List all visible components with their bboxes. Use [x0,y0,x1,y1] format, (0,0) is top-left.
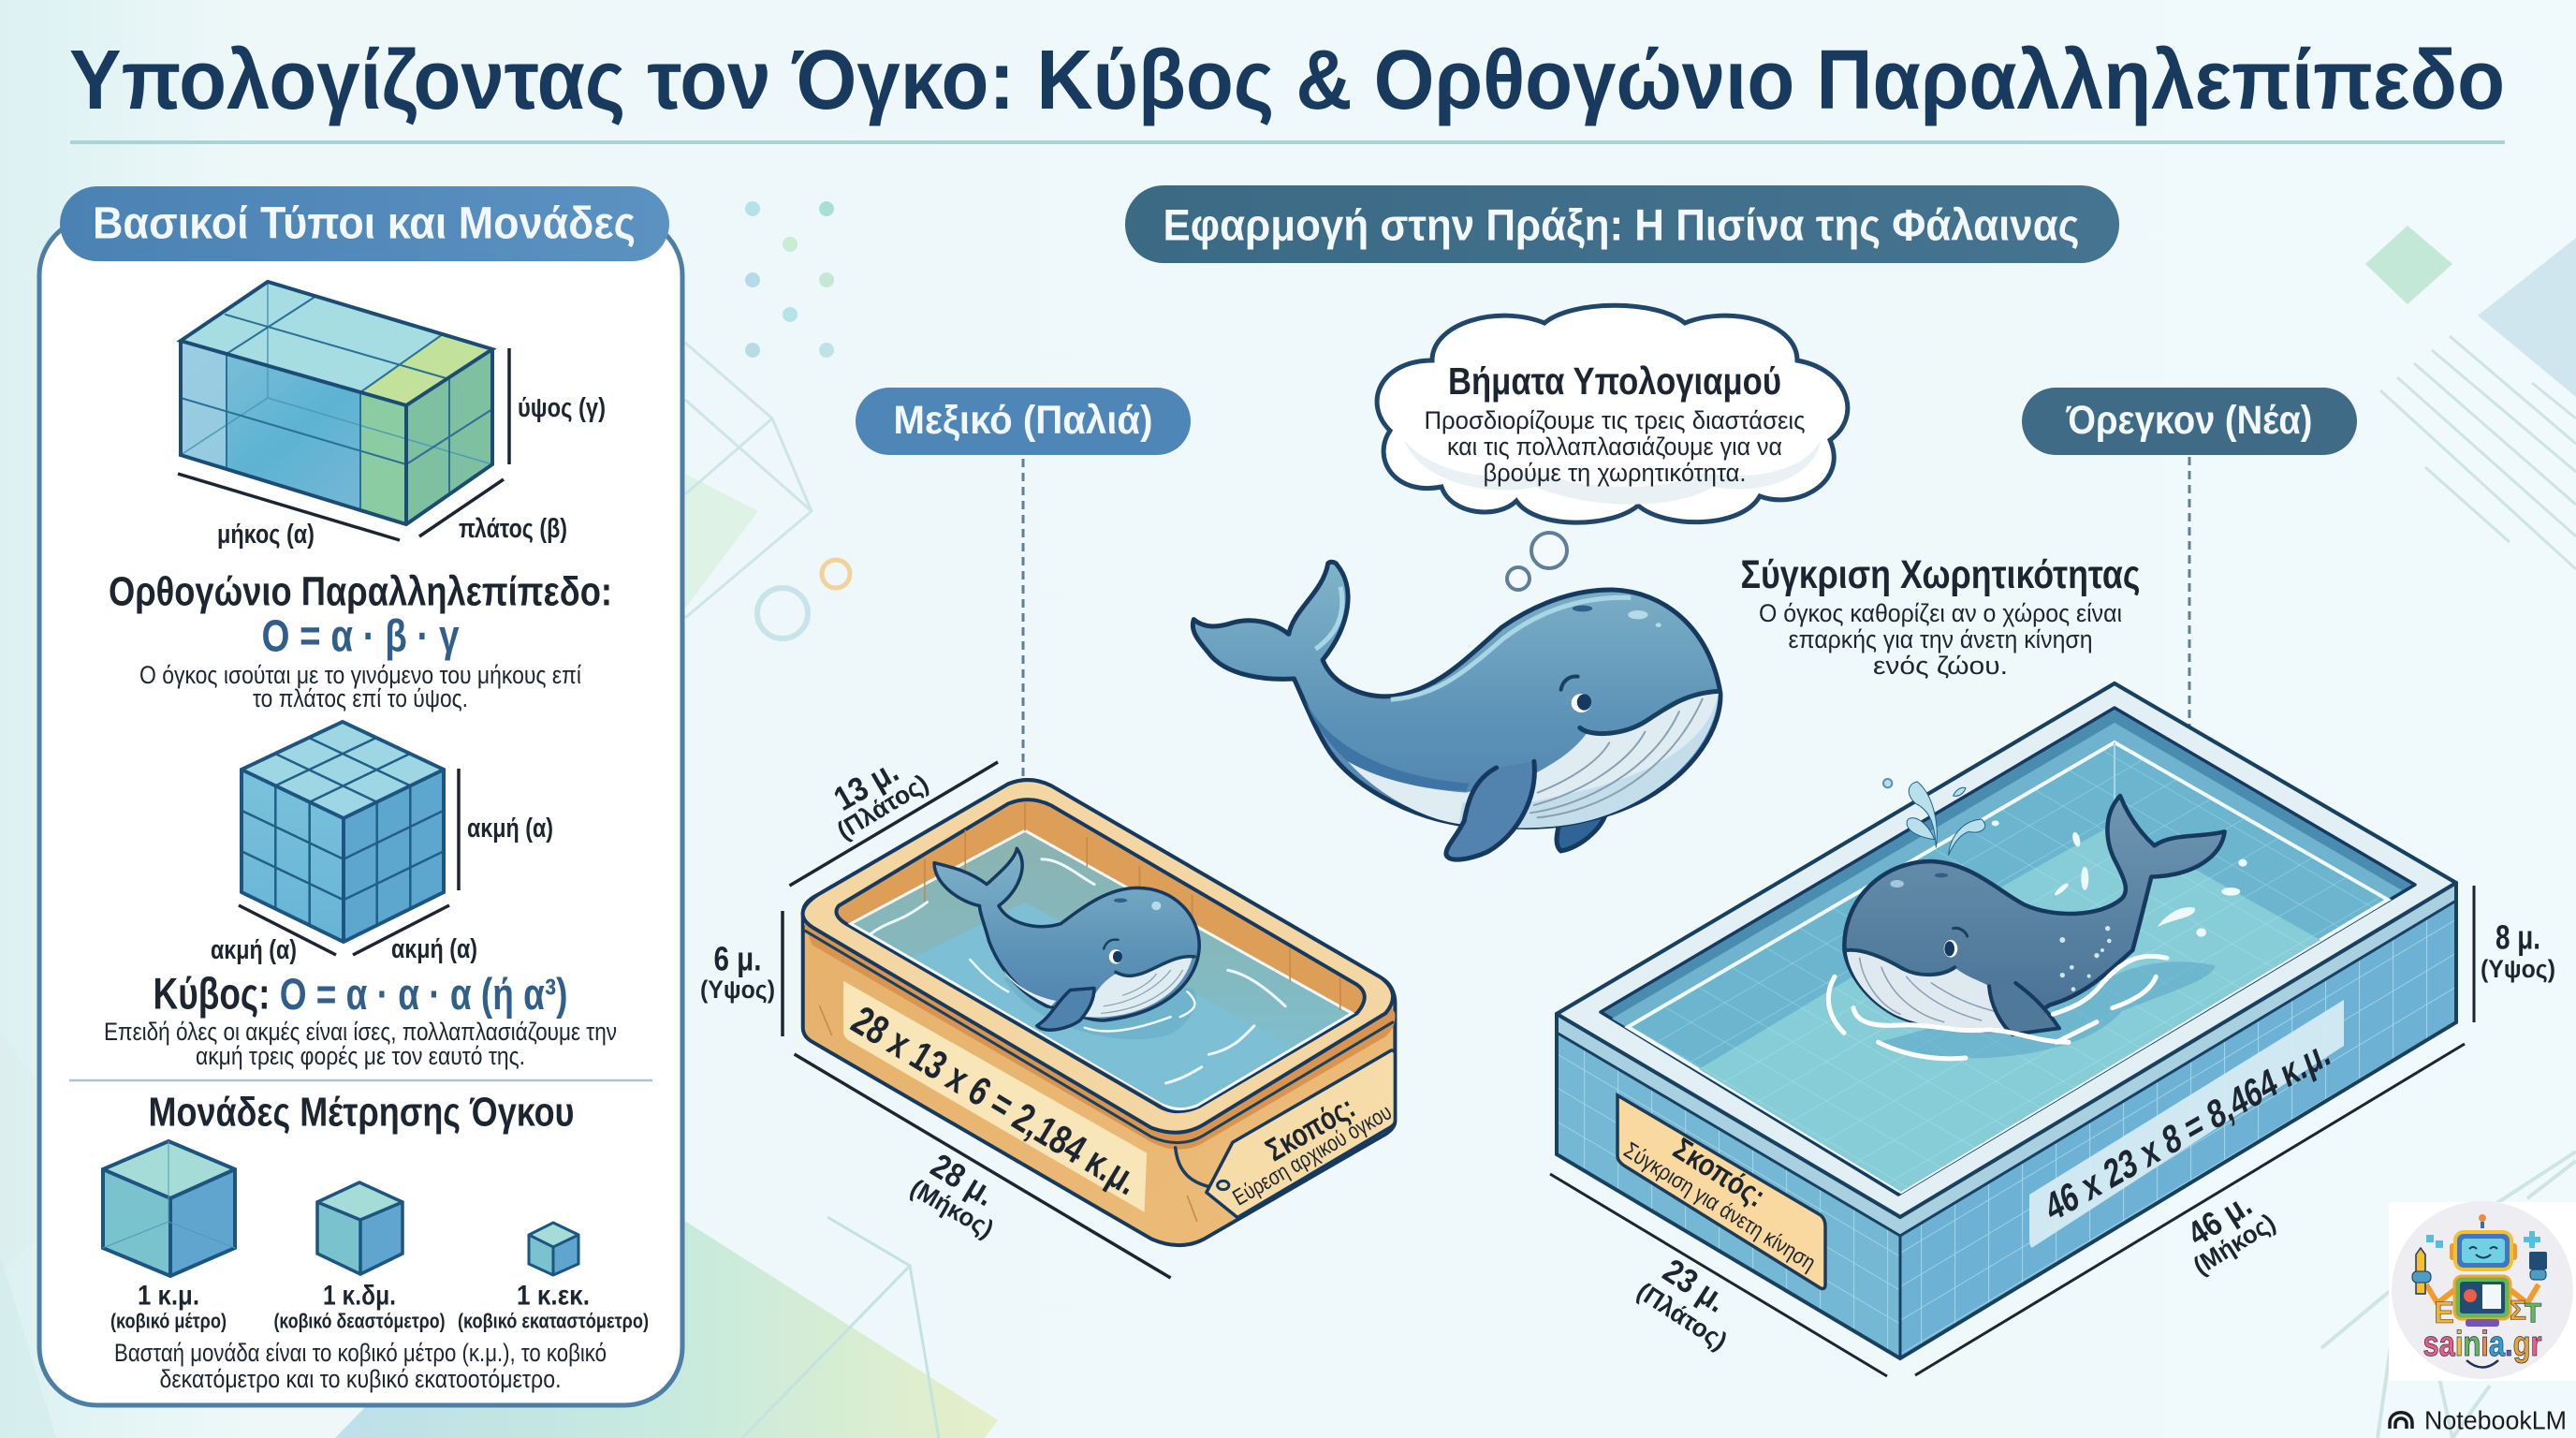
logo: sainia.gr [2389,1201,2576,1381]
prism formula: το πλάτος επί το ύψος. [253,684,468,712]
cube dimension labels: ακμή (α) [211,935,297,965]
Mexico whale [934,848,1199,1039]
Mexico tag text: Σκοπός: [1260,1090,1361,1168]
unit labels: (κοβικό μέτρο) [110,1309,227,1333]
logo: sainia.gr: Σ [2510,1296,2526,1326]
comparison text: ενός ζώου. [1873,652,2008,680]
heading: application [1125,185,2119,263]
prism formula: Ο όγκος ισούται με το γινόμενο του μήκους επί [139,661,581,689]
units note [114,1339,607,1393]
unit labels: (κοβικό εκαταστόμετρο) [458,1309,649,1333]
cube dimension labels: ακμή (α) [467,814,553,844]
unit labels: 1 κ.δμ. [323,1281,396,1311]
Mexico volume calculation: 28 x 13 x 6 = 2,184 κ.μ. [843,998,1147,1204]
label: Mexico [856,388,1191,455]
Oregon tag: Σύγκριση για άνετη κίνηση [1619,1137,1820,1276]
panel heading [60,186,669,261]
panel frame [39,217,682,1405]
comparison text: επαρκής για την άνετη κίνηση [1788,625,2093,653]
diagram: cube [239,722,459,955]
label: Mexico: Μεξικό (Παλιά) [893,398,1153,443]
label: Oregon [2022,388,2357,455]
logo: sainia.gr: Ε [2434,1296,2454,1329]
Oregon dimensions: (Μήκος) [2188,1209,2280,1280]
thought cloud: calculation steps: Προσδιορίζουμε τις τρεις διαστάσεις [1425,406,1805,434]
Oregon dimensions: 23 μ. [1657,1251,1734,1320]
label: Oregon: Όρεγκον (Νέα) [2066,398,2312,443]
prism dimension labels: ύψος (γ) [518,393,606,423]
Oregon pool [1550,683,2555,1376]
Mexico tag text: Εύρεση αρχικού όγκου [1229,1100,1396,1211]
unit cubes [103,1141,578,1276]
heading: application: Εφαρμογή στην Πράξη: Η Πισίνα της Φάλαινας [1163,200,2080,249]
Oregon dimensions: (Πλάτος) [1632,1277,1732,1356]
Oregon dimensions: 46 μ. [2181,1185,2258,1253]
logo: sainia.gr: Τ [2525,1298,2541,1329]
units note: δεκατόμετρο και το κυβικό εκατοοτόμετρο. [159,1365,562,1393]
thought cloud: calculation steps: βρούμε τη χωρητικότητα. [1483,459,1747,487]
cube formula: Επειδή όλες οι ακμές είναι ίσες, πολλαπλασιάζουμε την [104,1018,617,1046]
prism formula: Ορθογώνιο Παραλληλεπίπεδο: [109,569,612,614]
cube dimension labels: ακμή (α) [391,934,477,964]
Oregon volume plate [2029,1000,2344,1247]
units heading: Μονάδες Μέτρησης Όγκου [148,1090,575,1135]
cube formula: Κύβος: Ο = α · α · α (ή α³) [154,968,567,1019]
logo: sainia.gr: sainia.gr [2422,1325,2542,1364]
cube formula [104,968,617,1070]
thought cloud: calculation steps: και τις πολλαπλασιάζουμε για να [1447,433,1782,461]
comparison text: Ο όγκος καθορίζει αν ο χώρος είναι [1759,599,2122,627]
thought cloud: calculation steps: Βήματα Υπολογιαμού [1448,360,1781,403]
Mexico dimensions: 13 μ. [827,751,904,818]
cube formula: ακμή τρεις φορές με τον εαυτό της. [196,1042,525,1070]
Oregon tag [1617,1095,1825,1288]
prism formula: Ο = α · β · γ [262,612,460,661]
panel: basic formulas and units [39,186,682,1405]
prism dimension labels: πλάτος (β) [459,514,567,544]
prism dimension labels [217,393,606,550]
thought cloud: calculation steps [1377,305,1848,590]
unit labels: 1 κ.εκ. [517,1281,590,1311]
Oregon dimensions: (Υψος) [2481,955,2555,983]
comparison text: Σύγκριση Χωρητικότητας [1741,552,2140,597]
comparison text [1741,552,2140,680]
Mexico dimensions: (Μήκος) [905,1174,999,1243]
units note: Βασταή μονάδα είναι το κοβικό μέτρο (κ.μ.), το κοβικό [114,1339,607,1367]
Mexico dimensions: 28 μ. [925,1146,1002,1213]
Mexico dimensions [700,751,1171,1278]
Mexico pool [700,751,1396,1278]
unit labels: (κοβικό δεαστόμετρο) [273,1309,446,1333]
Mexico dimensions: 6 μ. [713,940,762,977]
cube dimension labels [211,814,553,965]
Oregon volume calculation: 46 x 23 x 8 = 8,464 κ.μ. [2040,1030,2335,1230]
Oregon dimensions [1550,886,2555,1376]
Mexico dimensions: (Υψος) [700,976,775,1004]
Oregon whale [1828,779,2247,1059]
diagram: rectangular prism [178,282,509,540]
Oregon tag: Σκοπός: [1667,1131,1772,1213]
Oregon dimensions: 8 μ. [2496,917,2540,957]
unit labels [110,1281,649,1333]
Mexico dimensions: (Πλάτος) [832,769,933,845]
NotebookLM mark: NotebookLM [2424,1406,2567,1434]
unit labels: 1 κ.μ. [138,1281,199,1311]
panel heading: Βασικοί Τύποι και Μονάδες [93,198,636,249]
prism dimension labels: μήκος (α) [217,520,315,550]
prism formula [109,569,612,712]
central whale [1193,562,1720,859]
